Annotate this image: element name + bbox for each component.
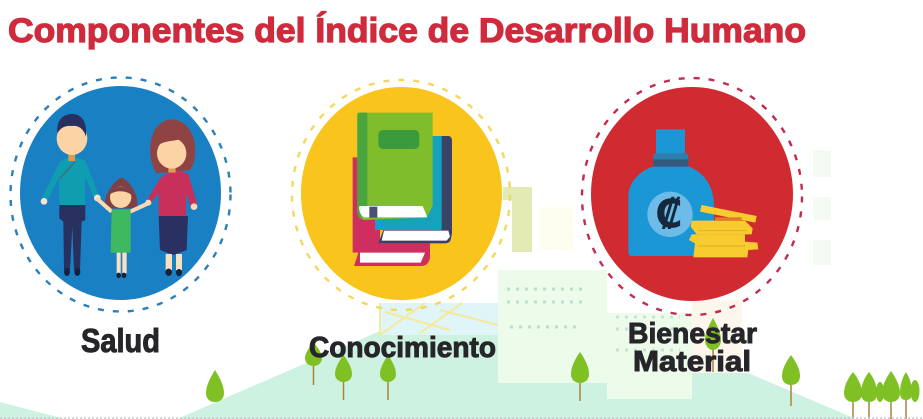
trees [206, 318, 920, 419]
teal book [375, 136, 452, 243]
colon currency symbol: ₡ [655, 191, 683, 237]
red book [353, 157, 430, 266]
icon: money bag and coins [628, 129, 758, 257]
dashed ring: Conocimiento [292, 80, 510, 310]
father [41, 114, 101, 276]
panel: Conocimiento [292, 80, 510, 310]
panel: Salud [10, 78, 230, 312]
title: Componentes del Índice de Desarrollo Humano [8, 12, 806, 50]
label: Bienestar: Bienestar [628, 318, 757, 350]
blue circle [20, 86, 221, 300]
yellow circle [301, 87, 502, 300]
dashed ring: Bienestar Material [582, 78, 802, 315]
icon: books [353, 113, 452, 266]
child [97, 177, 148, 278]
panel: Bienestar Material [582, 78, 802, 315]
red circle [591, 87, 793, 301]
icon: family [41, 114, 197, 278]
label: Salud: Salud [81, 322, 160, 359]
dashed ring: Salud [10, 78, 230, 312]
label: Material: Material [633, 346, 751, 378]
background: pale city and hill [0, 150, 856, 419]
label: Conocimiento: Conocimiento [309, 332, 496, 364]
mother [145, 119, 197, 276]
coins [689, 205, 758, 257]
green book [357, 113, 433, 220]
